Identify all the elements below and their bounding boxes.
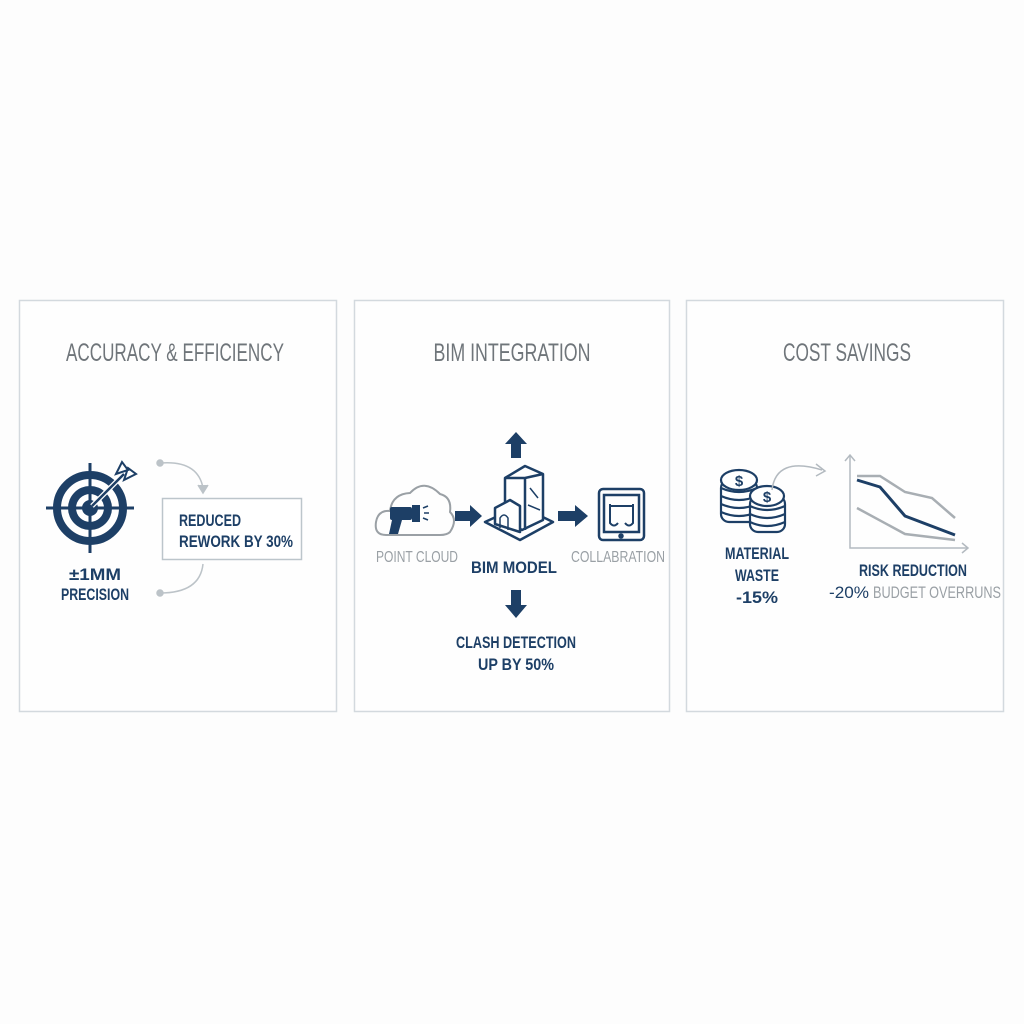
text: clash detection: CLASH DETECTION xyxy=(456,633,576,652)
panel: BIM integration: UP BY 50% xyxy=(478,655,554,674)
panel: cost savings: -15% xyxy=(736,588,778,607)
arrow: right 2 xyxy=(558,505,588,527)
label: point cloud: POINT CLOUD xyxy=(376,549,458,566)
icon: tablet xyxy=(599,489,644,540)
callout box: reduced rework: REDUCED xyxy=(179,511,241,530)
icon: target xyxy=(46,462,136,553)
text: material waste: MATERIAL xyxy=(725,544,789,563)
panel: cost savings: -20% xyxy=(829,583,869,602)
arrow: curved bottom xyxy=(157,564,203,596)
heading: cost savings: COST SAVINGS xyxy=(783,339,911,367)
icon: point cloud scanner xyxy=(376,486,454,535)
arrow: curved top xyxy=(157,460,208,493)
text: ±1MM precision: ±1MM xyxy=(69,565,121,584)
icon: coins: $ xyxy=(763,489,772,506)
arrow: curved to chart xyxy=(772,464,825,490)
panel: cost savings: WASTE xyxy=(735,566,779,585)
icon: building xyxy=(485,466,553,540)
callout box: reduced rework xyxy=(162,498,302,560)
icon: coins xyxy=(721,470,785,532)
label: collabration: COLLABRATION xyxy=(571,549,665,566)
callout box: reduced rework: REWORK BY 30% xyxy=(179,532,293,551)
panel: BIM integration xyxy=(354,300,670,712)
heading: BIM integration: BIM INTEGRATION xyxy=(434,339,590,367)
text: risk reduction: RISK REDUCTION xyxy=(859,561,967,580)
arrow: right 1 xyxy=(455,505,482,527)
heading: accuracy & efficiency: ACCURACY & EFFICIENCY xyxy=(66,339,284,367)
panel: accuracy & efficiency: PRECISION xyxy=(61,585,129,604)
arrow: up xyxy=(505,432,527,458)
label: BIM model: BIM MODEL xyxy=(471,558,557,577)
line chart: risk reduction xyxy=(845,455,968,553)
panel: accuracy & efficiency xyxy=(20,300,336,712)
panel: cost savings xyxy=(686,300,1004,712)
icon: coins: $ xyxy=(735,473,744,490)
arrow: down xyxy=(505,590,527,618)
